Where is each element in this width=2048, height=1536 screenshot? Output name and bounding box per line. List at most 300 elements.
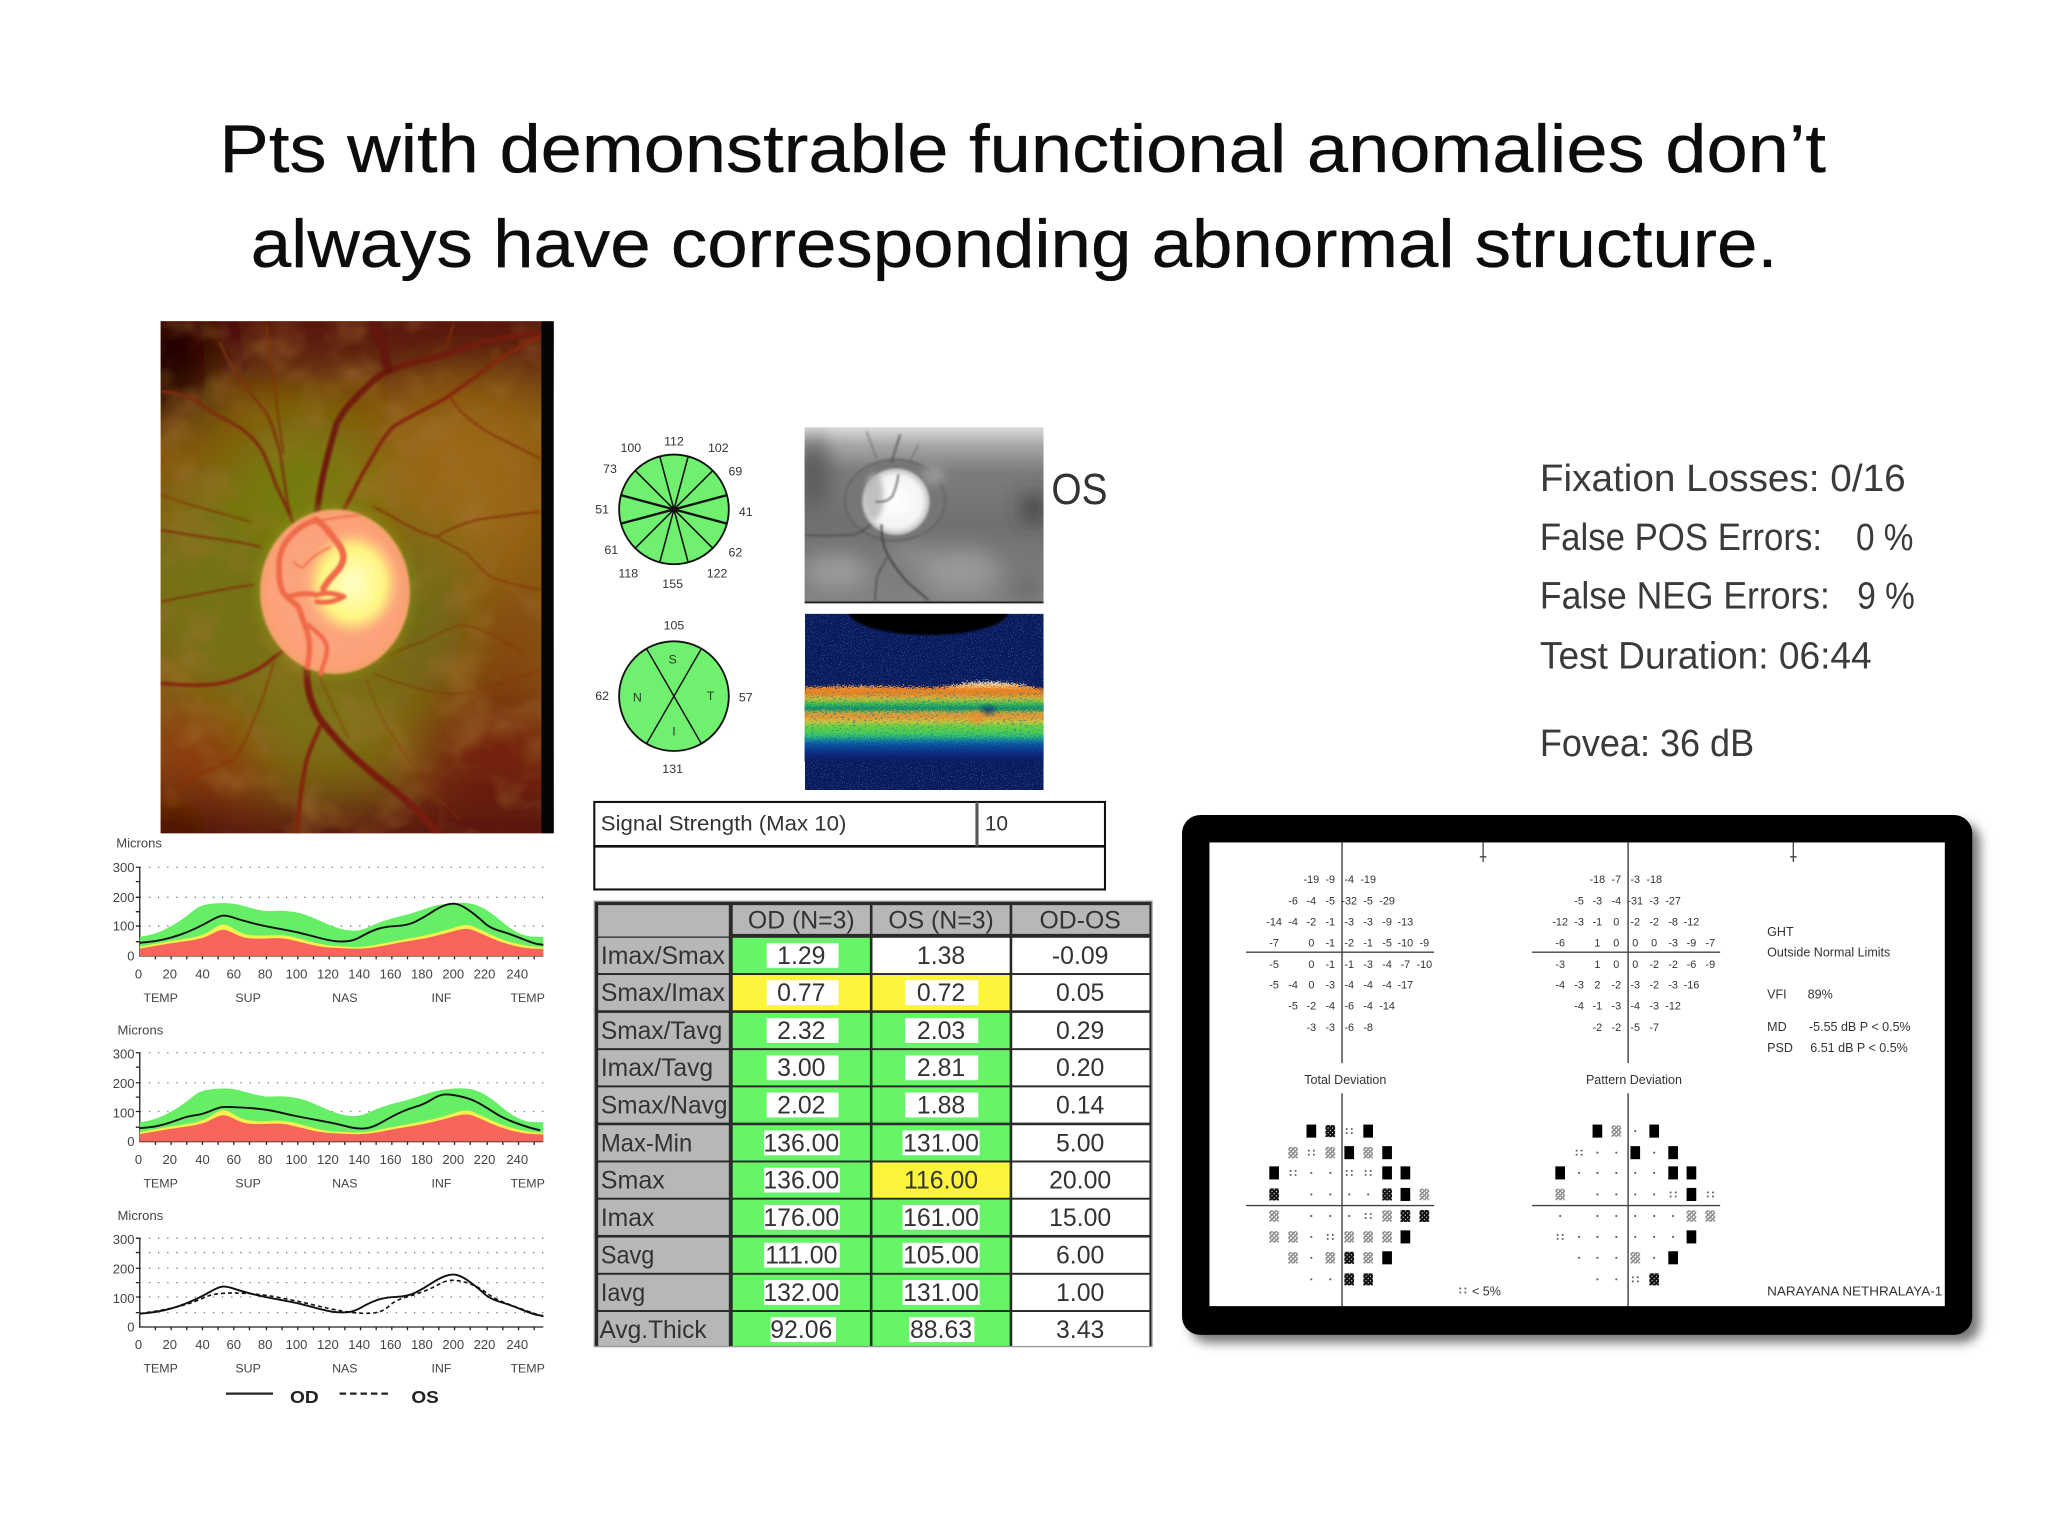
total deviation numeric plot: -5	[1269, 959, 1279, 971]
total deviation probability symbols	[1269, 1125, 1429, 1285]
global indices: Outside Normal Limits	[1767, 946, 1890, 960]
RNFL thickness chart OS: 220	[474, 1152, 495, 1167]
total deviation numeric plot: -5	[1325, 895, 1335, 907]
pattern deviation numeric plot: -7	[1649, 1022, 1659, 1034]
RNFL thickness comparison chart: TEMP	[143, 1362, 178, 1376]
total deviation numeric plot: -4	[1363, 980, 1373, 992]
RNFL thickness comparison chart: 240	[506, 1337, 528, 1352]
pattern deviation numeric plot: -2	[1612, 1022, 1621, 1034]
RNFL thickness comparison chart: 60	[227, 1337, 241, 1352]
row Imax/Tavg: 0.20	[1056, 1055, 1104, 1082]
segmental RNFL clock chart	[595, 434, 753, 591]
quadrant RNFL chart: 62	[595, 689, 609, 703]
RNFL thickness chart OD: 20	[163, 966, 177, 981]
row Iavg: Iavg	[601, 1280, 645, 1307]
row Smax/Tavg: 2.32	[777, 1018, 825, 1045]
probability legend	[1459, 1285, 1501, 1299]
RNFL thickness chart OS: 80	[258, 1152, 272, 1167]
RNFL thickness chart OS: 160	[380, 1152, 401, 1167]
pattern deviation numeric plot: 0	[1613, 959, 1619, 971]
pattern deviation numeric plot: -2	[1593, 1022, 1602, 1034]
global indices: -5.55 dB P < 0.5%	[1809, 1020, 1911, 1034]
RNFL thickness chart OS: SUP	[235, 1176, 261, 1190]
eye label OS: OS	[1051, 466, 1108, 514]
segmental RNFL clock chart: 122	[707, 566, 727, 580]
pattern deviation numeric plot: -2	[1612, 980, 1621, 992]
pattern deviation numeric plot: 1	[1594, 959, 1600, 971]
quadrant RNFL chart: S	[669, 653, 677, 667]
row Imax: 15.00	[1049, 1205, 1111, 1232]
RNFL thickness comparison chart: 20	[163, 1337, 177, 1352]
pattern deviation numeric plot: -5	[1574, 895, 1584, 907]
pattern deviation numeric plot: -3	[1612, 1001, 1621, 1013]
probability legend: < 5%	[1472, 1285, 1501, 1299]
RNFL thickness chart OD: 300	[113, 860, 135, 875]
RNFL thickness chart OS: INF	[431, 1176, 452, 1190]
total deviation numeric plot: -9	[1382, 916, 1392, 928]
total deviation numeric plot: -5	[1288, 1001, 1298, 1013]
segmental RNFL clock chart: 112	[664, 434, 684, 448]
segmental RNFL clock chart: 69	[728, 464, 742, 478]
row Avg.Thick: 92.06	[770, 1317, 832, 1344]
total deviation numeric plot: -6	[1344, 1022, 1354, 1034]
title	[219, 112, 1826, 282]
RNFL thickness chart OD: 180	[411, 966, 433, 981]
row Imax	[598, 1200, 1149, 1235]
pattern deviation numeric plot: -18	[1646, 874, 1662, 886]
row Avg.Thick: Avg.Thick	[600, 1317, 707, 1344]
pattern deviation numeric plot: -6	[1555, 937, 1565, 949]
row Imax/Smax: 1.38	[917, 943, 965, 970]
plot headings: Total Deviation	[1304, 1073, 1386, 1087]
table header row	[598, 905, 1149, 936]
global indices: PSD	[1767, 1041, 1793, 1055]
row Smax/Imax: 0.77	[777, 980, 825, 1007]
pattern deviation numeric plot: -9	[1706, 959, 1715, 971]
pattern deviation numeric plot: -3	[1593, 895, 1602, 907]
signal strength box: Signal Strength (Max 10)	[601, 813, 846, 836]
row Smax/Tavg: 0.29	[1056, 1018, 1104, 1045]
RNFL thickness comparison chart: 120	[317, 1337, 339, 1352]
RNFL thickness chart OS: 140	[348, 1152, 370, 1167]
row Smax/Imax: 0.72	[917, 980, 965, 1007]
pattern deviation numeric plot: 0	[1632, 959, 1638, 971]
RNFL thickness comparison chart: 100	[286, 1337, 307, 1352]
RNFL thickness chart OD: 120	[317, 966, 339, 981]
RNFL thickness chart OD: Microns	[116, 836, 162, 851]
pattern deviation numeric plot: -2	[1649, 959, 1659, 971]
RNFL thickness chart OS: 200	[442, 1152, 464, 1167]
pattern deviation numeric plot: -2	[1649, 980, 1659, 992]
RNFL thickness chart OD: 0	[127, 949, 135, 964]
total deviation numeric plot: -9	[1325, 874, 1335, 886]
RNFL thickness chart OS: TEMP	[143, 1176, 178, 1190]
total deviation numeric plot: 0	[1308, 937, 1314, 949]
RNFL thickness chart OD: 200	[442, 966, 464, 981]
pattern deviation numeric plot: -2	[1649, 916, 1659, 928]
title: always have corresponding abnormal structure.	[251, 207, 1778, 282]
row Max-Min: Max-Min	[601, 1130, 692, 1157]
total deviation numeric plot: -1	[1325, 959, 1335, 971]
RNFL thickness comparison chart: TEMP	[510, 1362, 545, 1376]
plot headings: Pattern Deviation	[1586, 1073, 1682, 1087]
segmental RNFL clock chart: 102	[708, 441, 729, 455]
RNFL thickness comparison chart: 140	[348, 1337, 370, 1352]
total deviation numeric plot: -9	[1420, 937, 1429, 949]
total deviation numeric plot: -4	[1363, 1001, 1373, 1013]
fundus photograph of the optic disc	[160, 321, 554, 834]
total deviation numeric plot: -6	[1288, 895, 1298, 907]
RNFL thickness comparison chart: 100	[113, 1291, 135, 1306]
instrument footer: NARAYANA NETHRALAYA-1	[1767, 1285, 1942, 1299]
pattern deviation numeric plot: -3	[1668, 937, 1678, 949]
total deviation numeric plot	[1266, 874, 1432, 1034]
pattern deviation numeric plot: 1	[1594, 937, 1600, 949]
RNFL thickness chart OD: 160	[380, 966, 401, 981]
RNFL thickness chart OS: 20	[163, 1152, 177, 1167]
row Savg	[598, 1238, 1149, 1273]
total deviation numeric plot: -5	[1382, 937, 1392, 949]
row Smax/Navg: 0.14	[1056, 1092, 1105, 1119]
RNFL thickness chart OS: 100	[286, 1152, 307, 1167]
quadrant RNFL chart: I	[672, 724, 676, 738]
RNFL thickness comparison chart: INF	[431, 1362, 452, 1376]
pattern deviation numeric plot: -27	[1665, 895, 1681, 907]
total deviation numeric plot: -10	[1416, 959, 1432, 971]
row Smax/Navg	[598, 1087, 1149, 1123]
total deviation numeric plot: -29	[1379, 895, 1395, 907]
RNFL thickness chart OD: 0	[135, 966, 142, 981]
visual field reliability indices	[1540, 458, 1915, 765]
quadrant RNFL chart: T	[707, 689, 715, 703]
RNFL thickness comparison chart: 0	[127, 1320, 135, 1335]
RNFL thickness chart OS: 0	[127, 1134, 135, 1149]
total deviation numeric plot: -3	[1325, 980, 1335, 992]
RNFL thickness chart OD: 60	[227, 966, 241, 981]
pattern deviation numeric plot: -3	[1574, 916, 1584, 928]
segmental RNFL clock chart: 100	[621, 441, 641, 455]
RNFL thickness comparison chart: 200	[113, 1261, 135, 1276]
total deviation numeric plot: -1	[1363, 937, 1373, 949]
pattern deviation numeric plot: -6	[1687, 959, 1696, 971]
row Smax/Imax: 0.05	[1056, 980, 1104, 1007]
RNFL thickness chart OS: 0	[135, 1152, 142, 1167]
total deviation numeric plot: -17	[1398, 980, 1413, 992]
table header row: OS (N=3)	[888, 908, 994, 935]
total deviation numeric plot: -3	[1325, 1022, 1335, 1034]
total deviation numeric plot: -14	[1266, 916, 1282, 928]
visual field reliability indices: Fovea: 36 dB	[1540, 723, 1754, 765]
visual field reliability indices: Test Duration: 06:44	[1540, 636, 1872, 678]
signal strength box	[594, 802, 1105, 889]
pattern deviation numeric plot: -1	[1593, 916, 1602, 928]
segmental RNFL clock chart: 41	[739, 505, 753, 519]
RNFL thickness chart OD: NAS	[332, 991, 358, 1005]
segmental RNFL clock chart: 155	[662, 577, 683, 591]
RNFL thickness comparison chart: SUP	[235, 1362, 261, 1376]
pattern deviation numeric plot: -5	[1630, 1022, 1640, 1034]
total deviation numeric plot: -3	[1363, 916, 1373, 928]
row Imax/Tavg: Imax/Tavg	[601, 1055, 713, 1082]
total deviation numeric plot: -32	[1341, 895, 1357, 907]
quadrant RNFL chart: 105	[664, 619, 684, 633]
RNFL thickness chart OD	[113, 836, 545, 1005]
pattern deviation numeric plot: -16	[1684, 980, 1699, 992]
RNFL thickness chart OS: 200	[113, 1076, 135, 1091]
quadrant RNFL chart: 57	[739, 690, 753, 704]
visual field reliability indices: Fixation Losses: 0/16	[1540, 458, 1906, 500]
row Max-Min: 131.00	[903, 1130, 979, 1157]
plot headings	[1304, 1073, 1682, 1087]
RNFL thickness comparison chart: 220	[474, 1337, 495, 1352]
row Smax/Navg: 1.88	[917, 1092, 965, 1119]
row Savg: 105.00	[903, 1243, 979, 1270]
pattern deviation numeric plot: -3	[1574, 980, 1584, 992]
RNFL thickness chart OD: 40	[195, 966, 210, 981]
row Imax: Imax	[601, 1205, 655, 1232]
row Imax/Tavg	[598, 1050, 1149, 1085]
row Smax/Imax	[598, 975, 1149, 1010]
pattern deviation numeric plot: -4	[1555, 980, 1565, 992]
total deviation numeric plot: 0	[1308, 959, 1314, 971]
RNFL thickness chart OS: 100	[113, 1105, 135, 1120]
pattern deviation numeric plot: -3	[1630, 874, 1640, 886]
row Smax/Navg: 2.02	[777, 1092, 825, 1119]
total deviation numeric plot: 0	[1308, 980, 1314, 992]
global indices: 6.51 dB P < 0.5%	[1810, 1041, 1908, 1055]
panel: visual field printout	[1182, 815, 1980, 1343]
total deviation numeric plot: -3	[1363, 959, 1373, 971]
RNFL thickness chart OS: 300	[113, 1047, 135, 1062]
title: Pts with demonstrable functional anomalies don’t	[219, 112, 1826, 187]
pattern deviation numeric plot: -4	[1612, 895, 1621, 907]
pattern deviation numeric plot: -7	[1706, 937, 1715, 949]
row Imax/Tavg: 2.81	[917, 1055, 965, 1082]
row Smax: 136.00	[763, 1168, 839, 1195]
total deviation numeric plot: -8	[1363, 1022, 1373, 1034]
total deviation numeric plot: -19	[1304, 874, 1319, 886]
pattern deviation numeric plot: 0	[1651, 937, 1657, 949]
table header row: OD-OS	[1040, 908, 1121, 935]
RNFL thickness chart OD: 100	[286, 966, 307, 981]
row Smax: 20.00	[1049, 1168, 1111, 1195]
signal strength box: 10	[985, 813, 1008, 836]
total deviation numeric plot: -7	[1269, 937, 1279, 949]
row Smax: Smax	[601, 1168, 665, 1195]
segmental RNFL clock chart: 118	[618, 566, 638, 580]
RNFL thickness chart OS: TEMP	[510, 1176, 545, 1190]
pattern deviation numeric plot: 2	[1594, 980, 1600, 992]
total deviation numeric plot: -3	[1307, 1022, 1316, 1034]
RNFL thickness chart OS: 120	[317, 1152, 339, 1167]
visual field reliability indices: 9 %	[1857, 576, 1915, 618]
global indices: GHT	[1767, 925, 1794, 939]
pattern deviation numeric plot: -12	[1665, 1001, 1681, 1013]
grayscale disc photo	[797, 427, 1044, 603]
row Smax	[598, 1162, 1149, 1198]
RNFL thickness chart OD: 140	[348, 966, 370, 981]
pattern deviation numeric plot: 0	[1632, 937, 1638, 949]
row Savg: Savg	[601, 1243, 654, 1270]
fixation crosses	[1480, 842, 1797, 862]
total deviation numeric plot: -4	[1325, 1001, 1335, 1013]
global indices	[1767, 925, 1911, 1055]
RNFL thickness chart OS: 180	[411, 1152, 433, 1167]
segmental RNFL clock chart: 73	[603, 462, 617, 476]
total deviation numeric plot: -1	[1325, 916, 1335, 928]
pattern deviation numeric plot: -4	[1574, 1001, 1584, 1013]
pattern deviation numeric plot: -1	[1593, 1001, 1602, 1013]
RNFL thickness comparison chart: 0	[135, 1337, 142, 1352]
total deviation numeric plot: -3	[1344, 916, 1354, 928]
global indices: VFI	[1767, 988, 1787, 1002]
pattern deviation numeric plot: -31	[1627, 895, 1643, 907]
row Imax/Smax: -0.09	[1052, 943, 1108, 970]
RNFL thickness comparison chart: 180	[411, 1337, 433, 1352]
pattern deviation numeric plot	[1552, 874, 1715, 1034]
RNFL thickness chart OD: TEMP	[510, 991, 545, 1005]
quadrant RNFL chart	[595, 619, 753, 776]
total deviation numeric plot: -2	[1307, 916, 1316, 928]
RNFL thickness chart OS: 40	[195, 1152, 210, 1167]
pattern deviation numeric plot: -4	[1630, 1001, 1640, 1013]
row Iavg: 132.00	[763, 1280, 839, 1307]
total deviation numeric plot: -7	[1401, 959, 1410, 971]
RNFL thickness chart OS: 60	[227, 1152, 241, 1167]
quadrant RNFL chart: N	[633, 690, 642, 704]
RNFL thickness comparison chart: NAS	[332, 1362, 358, 1376]
segmental RNFL clock chart: 61	[604, 543, 618, 557]
visual field reliability indices: False NEG Errors:	[1540, 576, 1830, 618]
total deviation numeric plot: -4	[1307, 895, 1316, 907]
pattern deviation numeric plot: -12	[1684, 916, 1699, 928]
pattern deviation numeric plot: -8	[1668, 916, 1678, 928]
total deviation numeric plot: -1	[1325, 937, 1335, 949]
pattern deviation numeric plot: -3	[1630, 980, 1640, 992]
pattern deviation numeric plot: -3	[1555, 959, 1565, 971]
OD / OS line legend: OS	[411, 1387, 439, 1407]
RNFL thickness chart OD: SUP	[235, 991, 261, 1005]
row Smax/Imax: Smax/Imax	[601, 980, 725, 1007]
row Smax/Tavg	[598, 1013, 1149, 1048]
row Smax: 116.00	[904, 1168, 978, 1195]
pattern deviation numeric plot: -2	[1668, 959, 1678, 971]
RNFL thickness comparison chart	[113, 1208, 545, 1376]
total deviation numeric plot: -4	[1382, 980, 1392, 992]
row Max-Min: 136.00	[763, 1130, 839, 1157]
pattern deviation numeric plot: -3	[1668, 980, 1678, 992]
pattern deviation numeric plot: -3	[1649, 895, 1659, 907]
total deviation numeric plot: -5	[1269, 980, 1279, 992]
RNFL thickness chart OD: 100	[113, 919, 135, 934]
RNFL statistics table	[594, 901, 1152, 1347]
row Imax/Tavg: 3.00	[777, 1055, 825, 1082]
row Iavg: 1.00	[1056, 1280, 1104, 1307]
row Max-Min	[598, 1125, 1149, 1160]
row Savg: 6.00	[1056, 1243, 1104, 1270]
RNFL thickness comparison chart: Microns	[118, 1208, 164, 1223]
pattern deviation numeric plot: -2	[1630, 916, 1640, 928]
row Avg.Thick: 3.43	[1056, 1317, 1104, 1344]
total deviation numeric plot: -5	[1363, 895, 1373, 907]
RNFL thickness chart OS: 240	[506, 1152, 528, 1167]
total deviation numeric plot: -10	[1398, 937, 1413, 949]
RNFL thickness chart OS	[113, 1022, 545, 1190]
RNFL thickness chart OS: NAS	[332, 1176, 358, 1190]
total deviation numeric plot: -2	[1344, 937, 1354, 949]
pattern deviation numeric plot: 0	[1613, 916, 1619, 928]
row Iavg: 131.00	[903, 1280, 979, 1307]
total deviation numeric plot: -4	[1344, 874, 1354, 886]
row Imax: 161.00	[903, 1205, 979, 1232]
total deviation numeric plot: -4	[1288, 916, 1298, 928]
pattern deviation numeric plot: -12	[1552, 916, 1568, 928]
pattern deviation numeric plot: -3	[1649, 1001, 1659, 1013]
RNFL thickness chart OD: TEMP	[143, 991, 178, 1005]
RNFL thickness comparison chart: 40	[195, 1337, 210, 1352]
total deviation numeric plot: -4	[1288, 980, 1298, 992]
visual field reliability indices: False POS Errors:	[1540, 517, 1822, 559]
RNFL thickness chart OD: 240	[506, 966, 528, 981]
row Iavg	[598, 1275, 1149, 1310]
row Imax: 176.00	[763, 1205, 839, 1232]
RNFL thickness comparison chart: 200	[442, 1337, 464, 1352]
RNFL thickness chart OD: INF	[431, 991, 452, 1005]
row Max-Min: 5.00	[1056, 1130, 1104, 1157]
OD / OS line legend	[226, 1387, 439, 1407]
total deviation numeric plot: -13	[1398, 916, 1413, 928]
row Imax/Smax: Imax/Smax	[601, 943, 725, 970]
pattern deviation numeric plot: 0	[1613, 937, 1619, 949]
total deviation numeric plot: -1	[1344, 959, 1354, 971]
total deviation numeric plot: -4	[1382, 959, 1392, 971]
RNFL thickness comparison chart: 80	[258, 1337, 272, 1352]
row Smax/Navg: Smax/Navg	[601, 1092, 728, 1119]
row Smax/Tavg: Smax/Tavg	[601, 1018, 722, 1045]
OCT cross-section scan	[804, 614, 1044, 790]
row Savg: 111.00	[765, 1243, 837, 1270]
global indices: 89%	[1808, 988, 1833, 1002]
disc with pallor	[255, 504, 415, 679]
segmental RNFL clock chart: 51	[595, 502, 609, 516]
total deviation numeric plot: -14	[1379, 1001, 1395, 1013]
RNFL thickness comparison chart: 300	[113, 1232, 135, 1247]
row Imax/Smax	[598, 938, 1149, 973]
quadrant RNFL chart: 131	[662, 762, 683, 776]
total deviation numeric plot: -19	[1360, 874, 1376, 886]
plot axes	[1246, 842, 1720, 1306]
row Imax/Smax: 1.29	[777, 943, 825, 970]
total deviation numeric plot: -6	[1344, 1001, 1354, 1013]
row Smax/Tavg: 2.03	[917, 1018, 965, 1045]
RNFL thickness chart OD: 200	[113, 890, 135, 905]
pattern deviation probability symbols	[1555, 1125, 1715, 1285]
RNFL thickness comparison chart: 160	[380, 1337, 401, 1352]
OD / OS line legend: OD	[290, 1387, 319, 1407]
pattern deviation numeric plot: -7	[1612, 874, 1621, 886]
global indices: MD	[1767, 1020, 1787, 1034]
total deviation numeric plot: -4	[1344, 980, 1354, 992]
RNFL thickness chart OD: 80	[258, 966, 272, 981]
row Avg.Thick: 88.63	[910, 1317, 972, 1344]
visual field reliability indices: 0 %	[1856, 517, 1913, 559]
pattern deviation numeric plot: -9	[1687, 937, 1696, 949]
row Avg.Thick	[598, 1312, 1149, 1346]
RNFL thickness chart OD: 220	[474, 966, 495, 981]
total deviation numeric plot: -2	[1307, 1001, 1316, 1013]
segmental RNFL clock chart: 62	[728, 545, 742, 559]
RNFL thickness chart OS: Microns	[118, 1022, 164, 1037]
